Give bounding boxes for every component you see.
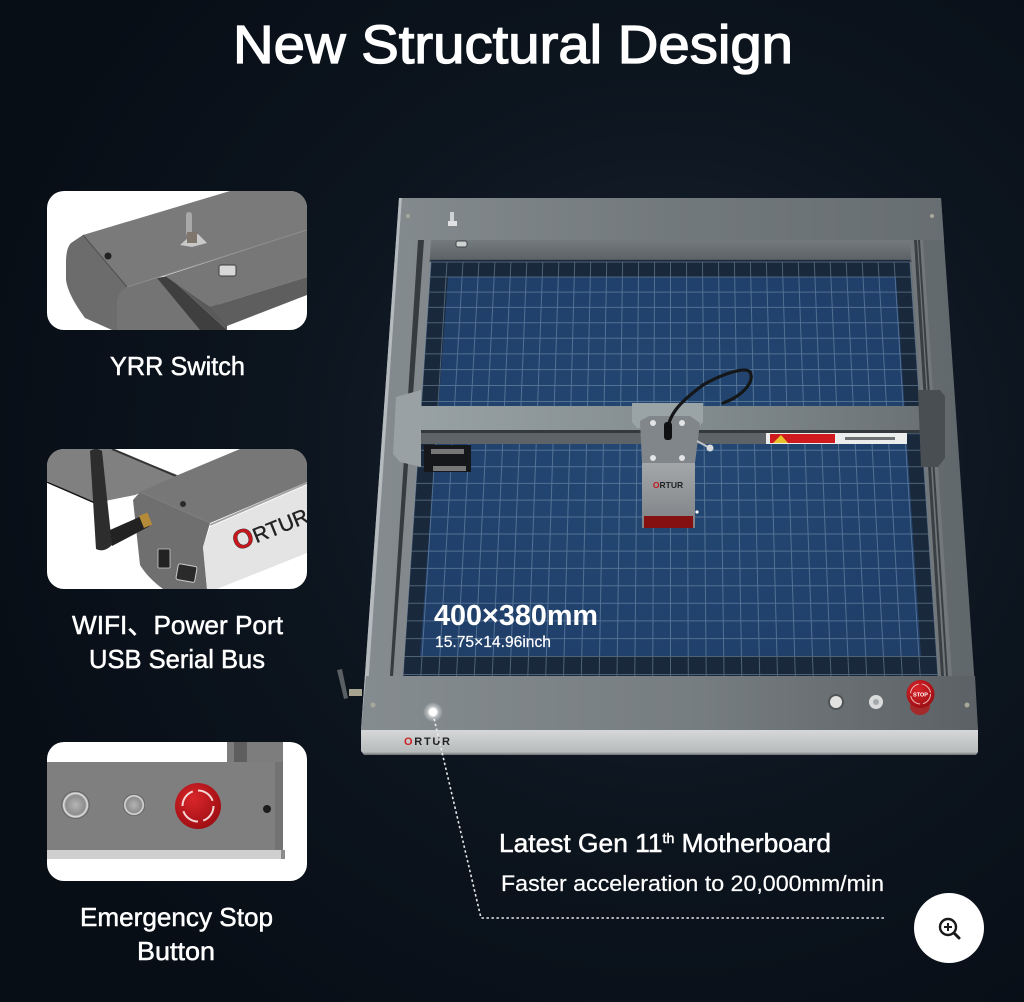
title: New Structural Design [233,15,793,75]
icon: toggle switch [180,212,207,247]
cable [667,370,751,436]
frame base [361,198,978,730]
callout: motherboard heading: Motherboard [674,828,831,858]
icon: top switch [448,212,457,226]
logo: ORTUR front: ORTUR [404,736,450,748]
logo: ORTUR: ORTUR [228,499,312,557]
callout: motherboard heading: th [663,830,674,846]
power button [828,694,844,710]
gantry [418,406,920,444]
icon: screw [180,501,186,507]
work area dark backing [403,260,938,676]
screws [370,214,970,708]
warning label [766,433,907,444]
head screws [650,420,685,461]
label: WIFI, Power Port, USB Serial Bus: WIFI、Power Port [72,610,284,640]
stop button [906,680,934,715]
panel: emergency stop photo [47,742,307,881]
bottom plate [361,676,978,730]
icon: emergency stop [175,783,221,829]
icon: magnifier [940,919,959,938]
callout: motherboard detail: Faster acceleration to 20,000mm/min [501,871,884,896]
white dot [695,510,699,514]
stepper motor [424,445,471,472]
label: Emergency Stop Button [80,902,273,966]
label: Emergency Stop Button: Emergency Stop [80,902,273,932]
right gantry end [918,390,945,467]
stop button: STOP [913,692,928,698]
icon: antenna [90,449,152,550]
laser head [632,370,751,528]
icon: top USB [456,241,467,247]
icon: screw [263,805,271,813]
work area blue sheet [420,277,921,656]
icon: indicator button [123,794,145,816]
left rail [389,240,431,676]
callout: motherboard heading: Latest Gen 11 [499,828,660,858]
adjusting knob [697,441,714,452]
label: 15.75×14.96inch: 15.75×14.96inch [435,634,551,651]
panel: YRR switch photo [47,191,307,330]
antenna side [337,669,362,699]
laser window [644,516,693,528]
honeycomb grid [403,262,938,676]
icon: screw [104,252,112,260]
indicator button [869,695,883,709]
label: Emergency Stop Button: Button [137,936,215,966]
inner step [429,240,912,262]
label: WIFI, Power Port, USB Serial Bus: USB Serial Bus [89,644,265,674]
callout leader line [433,714,885,918]
label: WIFI, Power Port, USB Serial Bus [72,610,284,674]
motherboard indicator light [423,702,443,722]
icon: USB port [176,564,197,583]
front strip [361,730,978,755]
icon: USB port [219,265,236,276]
cable connector [664,422,672,440]
machine: laser engraver [337,198,978,755]
left gantry end [393,390,421,467]
right rail [910,240,952,676]
label: YRR Switch: YRR Switch [110,351,245,381]
icon: DC port [158,549,170,568]
label: 400×380mm: 400×380mm [434,600,598,632]
logo: ORTUR head: ORTUR [653,480,683,490]
icon: power button [62,791,90,819]
zoom button [914,893,984,963]
panel: WIFI and ports photo [47,449,312,589]
top plate [399,198,944,240]
